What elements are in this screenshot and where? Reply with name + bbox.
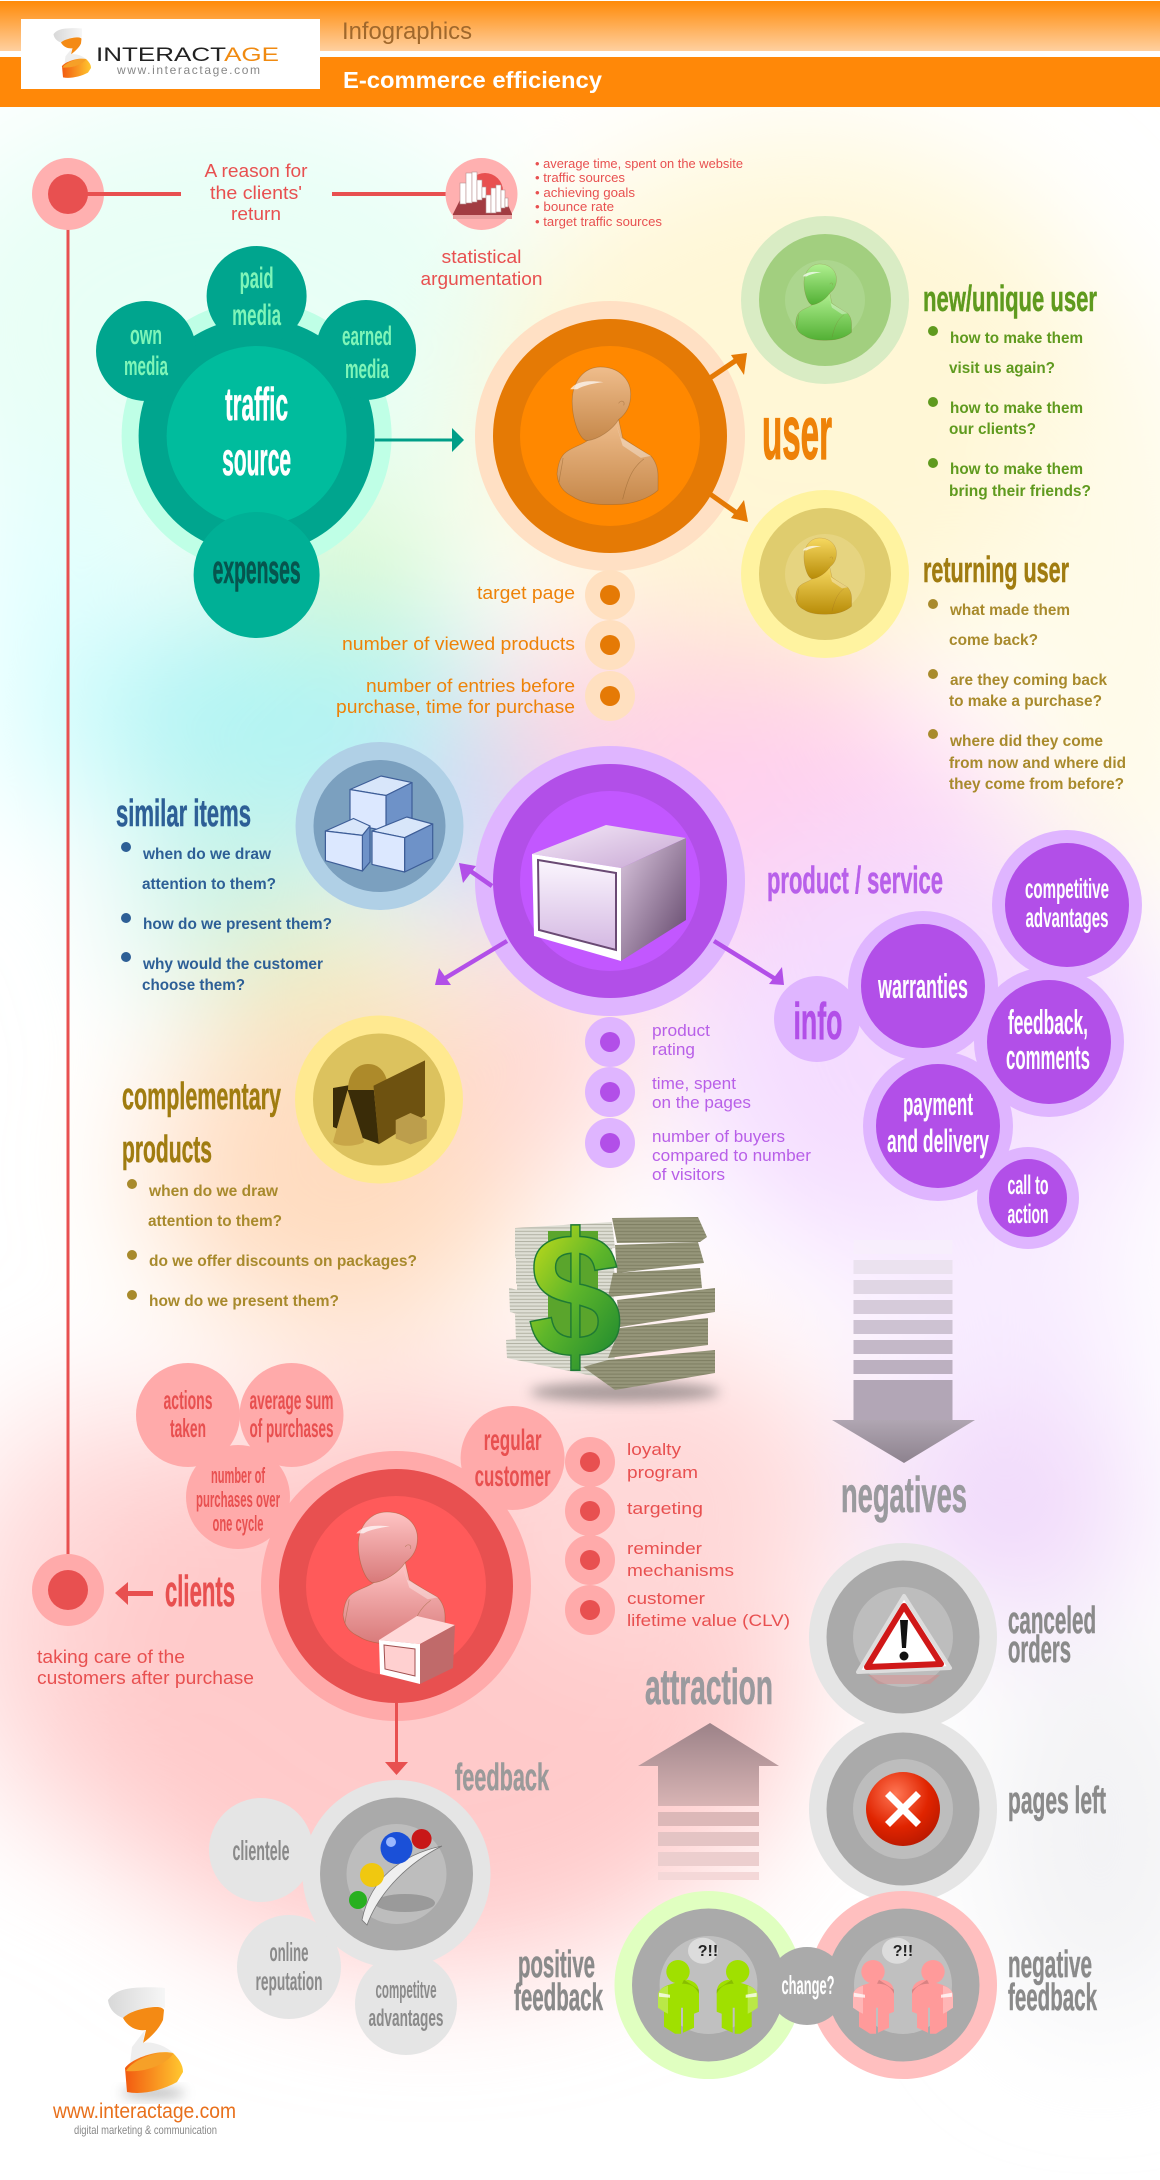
panel: clients circle: [261, 1451, 531, 1721]
header: logo box: [21, 19, 320, 89]
heading: complementary products: [122, 1076, 281, 1171]
bubble label: call to action: [1008, 1170, 1048, 1229]
label: positive feedback: feedback: [514, 1977, 603, 2019]
statistical argumentation label: argumentation: [420, 269, 542, 289]
heading: product / service: product / service: [767, 860, 943, 902]
icon: green user: [796, 264, 852, 340]
icon: complementary products: [333, 1060, 427, 1146]
arrows: product: [442, 868, 777, 980]
panel: returning user circle: [741, 490, 909, 658]
arrowhead: returning user: [731, 500, 748, 522]
traffic label: traffic source: [222, 378, 291, 485]
bubble label: number of purchases: number of: [211, 1463, 265, 1488]
bubble label: feedback comments: [1006, 1004, 1090, 1077]
user metrics: number of viewed products: [342, 634, 575, 654]
header: logo box: www.interactage.com: [116, 63, 260, 77]
bubble label: competitive advantages: [368, 1977, 444, 2032]
icon: green figures: [658, 1938, 758, 2034]
text: taking care: customers after purchase: [37, 1668, 254, 1688]
list: complementary questions: how do we present them?: [149, 1293, 339, 1310]
traffic label: paid media: paid: [240, 262, 274, 295]
traffic label: own media: [124, 320, 169, 381]
timeline end node: [32, 1554, 104, 1626]
heading: returning user: returning user: [923, 549, 1069, 590]
statistics list: • bounce rate: [535, 199, 614, 214]
list: similar items questions: when do we draw: [142, 846, 272, 863]
list: complementary questions: attention to them?: [148, 1213, 282, 1230]
bubble label: online reputation: [256, 1937, 322, 1996]
icon: money stack: $: [528, 1196, 622, 1395]
bubble: change?: change?: [782, 1970, 834, 2000]
icon: pink cube: [379, 1616, 455, 1684]
heading: negatives: negatives: [841, 1467, 967, 1523]
traffic label: traffic source: traffic: [225, 378, 288, 430]
icon: red figures: [853, 1938, 953, 2034]
bubble label: actions taken: [164, 1385, 212, 1443]
list: returning user questions: are they coming back: [950, 672, 1107, 689]
arrow: to feedback: [385, 1703, 408, 1775]
icon: pink user: [343, 1512, 445, 1644]
product metrics: of visitors: [652, 1165, 725, 1184]
traffic label: paid media: [232, 262, 281, 332]
list: new user questions: how to make them: [950, 400, 1083, 417]
bubble label: competitive advantages: advantages: [368, 2005, 444, 2032]
timeline start node: [32, 158, 446, 230]
text: taking care: taking care of the: [37, 1647, 185, 1667]
user metrics: [336, 570, 635, 721]
client metrics: [565, 1437, 790, 1635]
panel: product circle: [475, 746, 745, 1016]
list: returning user questions: come back?: [949, 632, 1038, 649]
icon: balls on arch: [349, 1829, 442, 1925]
bubble label: average sum of purchases: of purchases: [250, 1413, 334, 1443]
bubble label: number of purchases: purchases over: [196, 1487, 280, 1512]
footer logo: digital marketing & communication: [74, 2123, 217, 2137]
traffic label: earned media: media: [345, 354, 390, 384]
icon: statistics chart: [446, 158, 518, 230]
bubble label: number of purchases: [196, 1463, 280, 1536]
product metrics: compared to number: [652, 1146, 811, 1165]
bubble label: actions taken: actions: [164, 1385, 212, 1415]
list: similar items questions: choose them?: [142, 977, 245, 994]
reason text: A reason for: [204, 161, 308, 181]
heading: feedback: feedback: [455, 1757, 549, 1799]
panel: similar items circle: [296, 742, 464, 910]
list: returning user questions: to make a purchase?: [949, 693, 1102, 710]
bubble label: online reputation: reputation: [256, 1966, 322, 1996]
product metrics: [585, 1017, 811, 1184]
arrowhead: new user: [731, 353, 747, 375]
heading: clients: clients: [165, 1567, 235, 1616]
bubble label: competitive advantages: [1025, 873, 1109, 933]
panel: canceled orders circle: [809, 1543, 997, 1731]
bubble label: average sum of purchases: average sum: [250, 1385, 334, 1415]
heading: attraction: attraction: [645, 1659, 773, 1715]
panel: complementary circle: [295, 1016, 463, 1184]
list: new user questions: how to make them: [950, 461, 1083, 478]
header: top band: [0, 1, 1160, 107]
text: taking care: [37, 1647, 254, 1688]
bubble label: payment and delivery: payment: [903, 1086, 973, 1122]
bubble label: warranties: warranties: [877, 968, 968, 1006]
bubble label: info: info: [794, 993, 842, 1051]
bubble label: call to action: call to: [1008, 1170, 1048, 1200]
list: returning user questions: they come from before?: [949, 776, 1124, 793]
text: user: [762, 391, 832, 476]
traffic label: own media: own: [130, 320, 162, 350]
bubble: regular customer: [461, 1406, 565, 1510]
list: complementary questions: [127, 1179, 417, 1310]
bubble label: clientele: clientele: [232, 1835, 290, 1866]
arrow: to clients: [115, 1582, 153, 1605]
reason text: [204, 161, 308, 224]
traffic label: paid media: media: [232, 299, 281, 332]
panel: product info bubbles: [774, 830, 1142, 1249]
traffic label: earned media: [342, 321, 392, 384]
icon: product cube: [532, 825, 686, 961]
header: infographics label: Infographics: [342, 18, 472, 45]
product metrics: time, spent: [652, 1074, 736, 1093]
statistics list: • target traffic sources: [535, 214, 662, 229]
client metrics: targeting: [627, 1499, 703, 1518]
panel: positive feedback circle: [614, 1891, 802, 2079]
user metrics: target page: [477, 583, 575, 603]
traffic label: own media: media: [124, 351, 169, 381]
user metrics: number of entries before: [366, 676, 575, 696]
footer logo: www.interactage.com: [52, 2100, 236, 2123]
label: negative feedback: negative: [1008, 1944, 1092, 1986]
list: similar items questions: [121, 842, 332, 994]
icon: red figures: ?!!: [893, 1943, 913, 1960]
client metrics: reminder: [627, 1539, 702, 1558]
footer logo: [52, 1987, 236, 2137]
bubble label: number of purchases: one cycle: [212, 1511, 264, 1536]
header: logo box: INTERACT AGE: [96, 45, 279, 66]
list: new user questions: bring their friends?: [949, 483, 1091, 500]
panel: negative feedback circle: [809, 1891, 997, 2079]
arrow: negatives: [832, 1240, 975, 1463]
panel: pages left circle: [809, 1715, 997, 1903]
heading: complementary products: complementary: [122, 1076, 281, 1118]
list: returning user questions: where did they come: [949, 733, 1103, 750]
list: returning user questions: [928, 599, 1126, 793]
arrow: to new user: [710, 357, 741, 378]
icon: orange user: [557, 367, 658, 505]
client metrics: mechanisms: [627, 1561, 734, 1580]
timeline line: [66, 194, 70, 1590]
bubble label: payment and delivery: and delivery: [887, 1123, 989, 1159]
reason text: return: [231, 204, 281, 224]
client metrics: program: [627, 1463, 698, 1482]
product metrics: number of buyers: [652, 1127, 785, 1146]
client metrics: customer: [627, 1589, 705, 1608]
label: positive feedback: positive: [518, 1944, 595, 1986]
statistics list: [535, 156, 743, 229]
bubble label: payment and delivery: [887, 1086, 989, 1159]
statistical argumentation label: [420, 247, 542, 289]
bubble label: average sum of purchases: [250, 1385, 334, 1443]
user metrics: purchase, time for purchase: [336, 697, 575, 717]
client metrics: lifetime value (CLV): [627, 1611, 790, 1630]
list: returning user questions: from now and where did: [949, 755, 1126, 772]
panel: user circle: [475, 301, 745, 571]
header: title: E-commerce efficiency: [343, 67, 602, 93]
bubble: regular customer: customer: [475, 1460, 551, 1493]
arrow: attraction: [638, 1723, 779, 1880]
bubble label: online reputation: online: [270, 1937, 308, 1967]
client metrics: loyalty: [627, 1440, 682, 1459]
label: negative feedback: [1008, 1944, 1097, 2019]
statistics list: • average time, spent on the website: [535, 156, 743, 171]
panel: new user circle: [741, 216, 909, 384]
icon: blue cubes: [325, 776, 433, 872]
list: similar items questions: how do we present them?: [143, 916, 332, 933]
panel: feedback circle: [209, 1780, 490, 2055]
icon: red cross: [866, 1772, 940, 1846]
panel: traffic source: source: [222, 433, 291, 485]
icon: money stack: [506, 1196, 720, 1402]
icon: green figures: ?!!: [698, 1943, 718, 1960]
product metrics: rating: [652, 1040, 695, 1059]
list: returning user questions: what made them: [949, 602, 1070, 619]
bubble: regular customer: regular: [484, 1424, 542, 1457]
traffic label: earned media: earned: [342, 321, 392, 351]
list: new user questions: how to make them: [950, 330, 1083, 347]
statistical argumentation label: statistical: [442, 247, 522, 267]
list: similar items questions: why would the customer: [142, 956, 323, 973]
list: new user questions: [928, 326, 1091, 500]
label: canceled orders: [1008, 1600, 1096, 1671]
panel: client metric bubbles: [136, 1363, 344, 1549]
list: similar items questions: attention to them?: [142, 876, 276, 893]
label: positive feedback: [514, 1944, 603, 2019]
icon: warning: [858, 1596, 950, 1684]
bubble label: competitive advantages: competitve: [376, 1977, 436, 2004]
bubble label: actions taken: taken: [170, 1413, 206, 1443]
statistics list: • achieving goals: [535, 185, 636, 200]
arrow: to returning user: [710, 494, 741, 516]
list: new user questions: our clients?: [949, 421, 1036, 438]
heading: similar items: similar items: [116, 793, 251, 835]
bubble label: call to action: action: [1008, 1199, 1048, 1229]
list: complementary questions: when do we draw: [148, 1183, 279, 1200]
panel: traffic source: expenses: [213, 548, 301, 592]
heading: complementary products: products: [122, 1129, 212, 1171]
list: complementary questions: do we offer discounts on packages?: [149, 1253, 417, 1270]
statistics list: • traffic sources: [535, 170, 626, 185]
label: canceled orders: orders: [1008, 1629, 1071, 1671]
arrow: traffic to user: [375, 428, 464, 452]
product metrics: on the pages: [652, 1093, 751, 1112]
list: new user questions: visit us again?: [949, 360, 1055, 377]
arrowheads: product: [435, 863, 784, 985]
bubble: change?: [768, 1947, 846, 2025]
product metrics: product: [652, 1021, 710, 1040]
icon: yellow user: [796, 538, 852, 614]
reason text: the clients': [210, 183, 302, 203]
panel: traffic source: [96, 246, 416, 638]
